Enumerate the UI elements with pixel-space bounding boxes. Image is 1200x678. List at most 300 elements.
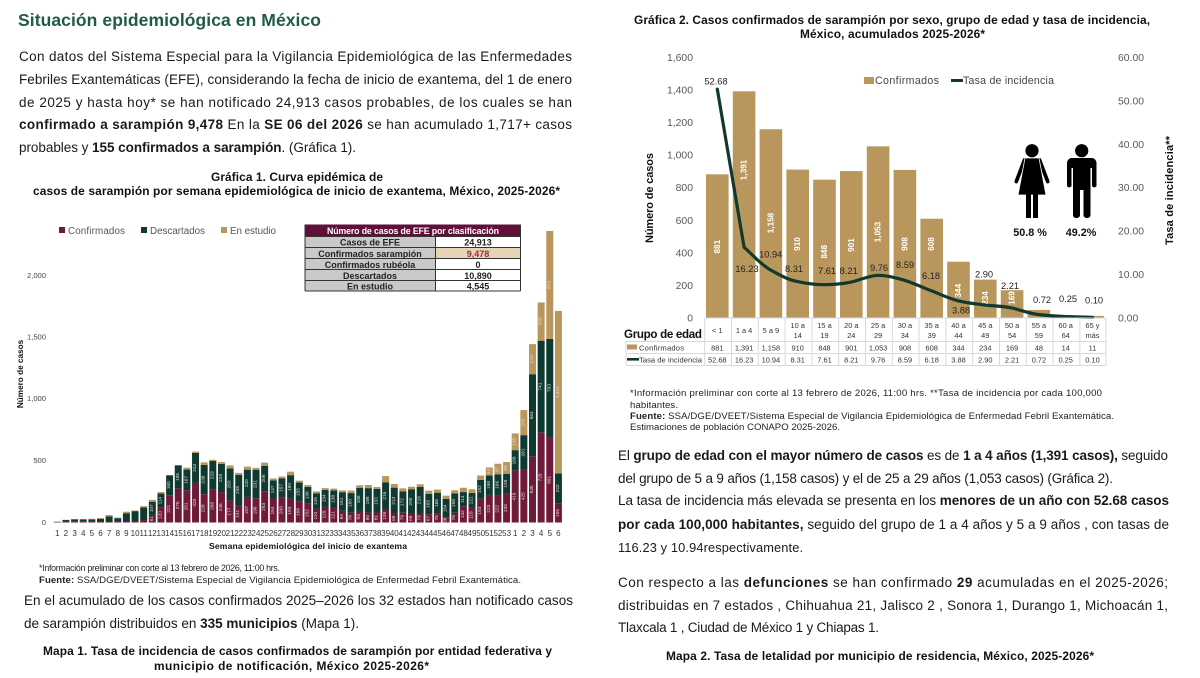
x axis week labels: Gráfica 1: 26 [269, 529, 278, 538]
x axis week labels: Gráfica 1: 51 [485, 529, 494, 538]
data labels: Gráfica 1: 198 [365, 496, 371, 504]
right axis: Gráfica 2: 20.00 [1118, 227, 1144, 238]
data labels: Gráfica 1: 216 [382, 491, 388, 500]
data labels: Gráfica 1: 76 [434, 515, 440, 520]
data labels: Gráfica 1: 79 [399, 515, 405, 520]
data table: Gráfica 2: 608 [926, 344, 938, 352]
legend: Gráfica 2: Tasa de incidencia [963, 75, 1054, 87]
legend: Gráfica 1: Descartados [150, 226, 205, 237]
footnote: Gráfica 1: *Información preliminar con corte al 13 febrero de 2026, 11:00 hrs. [39, 563, 280, 573]
data table: Gráfica 2: 2.21 [1005, 356, 1019, 364]
data table: Gráfica 2: 39 [928, 331, 936, 340]
x axis week labels: Gráfica 1: 22 [234, 529, 244, 538]
data labels: Gráfica 1: 165 [434, 499, 440, 507]
data table: Gráfica 2: 52.68 [708, 356, 727, 364]
line data labels: Gráfica 2: 0.72 [1033, 295, 1051, 305]
right axis: Gráfica 2: 10.00 [1118, 270, 1144, 281]
heading: Gráfica 1 [33, 170, 560, 198]
bar data labels: Gráfica 2: 848 [820, 244, 829, 259]
data labels: Gráfica 1: 87 [494, 466, 500, 472]
x axis week labels: Gráfica 1: 47 [450, 529, 460, 538]
data table: Gráfica 2: < 1 [712, 326, 723, 335]
table: Número de casos de EFE por clasificación: Casos de EFE [340, 238, 400, 248]
data labels: Gráfica 1: 238 [201, 475, 207, 484]
data labels: Gráfica 1: 425 [520, 492, 526, 500]
x axis week labels: Gráfica 1: 31 [312, 529, 321, 538]
data labels: Gráfica 1: 160 [348, 499, 354, 507]
data table: Gráfica 2: 50 a [1005, 321, 1020, 330]
y axis: Gráfica 1: 1,500 [27, 332, 46, 342]
line data labels: Gráfica 2: 2.21 [1001, 281, 1019, 291]
y axis: Gráfica 1 [27, 271, 46, 527]
footnote: Gráfica 2: habitantes. [630, 400, 678, 411]
data table: Gráfica 2: 0.10 [1085, 356, 1100, 364]
data labels: Gráfica 1: 691 [546, 475, 552, 484]
data table: Gráfica 2: 24 [847, 331, 855, 340]
data labels: Gráfica 1: 126 [313, 497, 319, 505]
data labels: Gráfica 1: 166 [494, 480, 500, 489]
data labels: Gráfica 1: 155 [296, 488, 302, 496]
x axis week labels: Gráfica 1: 23 [243, 529, 252, 538]
text block: intro paragraph: de 2025 y hasta hoy* se han notificado 24,913 casos probables, de los cuales se han [19, 95, 572, 110]
data labels: Gráfica 1: 243 [529, 355, 535, 363]
data table: Gráfica 2: 29 [874, 331, 882, 340]
x axis week labels: Gráfica 1: 24 [252, 529, 261, 538]
legend: Gráfica 1: Confirmados [68, 226, 125, 237]
data labels: Gráfica 1: 69 [408, 515, 414, 521]
data labels: Gráfica 1: 276 [175, 501, 181, 509]
text block: grupo de edad: del grupo de 5 a 9 años (1,158 casos) y el de 25 a 29 años (1,053 casos) (Gráfica 2). [618, 471, 1113, 486]
heading: Mapa 1: municipio de notificación, México 2025-2026* [154, 659, 429, 673]
left axis: Gráfica 2: 0 [687, 313, 693, 324]
data table: Gráfica 2: 8.31 [791, 356, 805, 364]
data table: Gráfica 2: 1,053 [869, 344, 887, 352]
data labels: Gráfica 1: 154 [443, 504, 449, 512]
table: Número de casos de EFE por clasificación: 0 [475, 260, 481, 270]
data labels: Gráfica 1: 741 [538, 382, 544, 391]
table: Número de casos de EFE por clasificación: En estudio [347, 282, 393, 292]
bar data labels: Gráfica 2: 908 [900, 237, 909, 251]
table: Número de casos de EFE por clasificación: Confirmados rubéola [325, 260, 416, 270]
data labels: Gráfica 1: 228 [201, 504, 207, 512]
data labels: Gráfica 1: 253 [261, 503, 267, 511]
data labels: Gráfica 1: 78 [451, 515, 457, 520]
data labels: Gráfica 1: 135 [512, 437, 518, 446]
heading: Mapa 1 [43, 644, 552, 673]
data labels: Gráfica 1: 203 [520, 418, 526, 427]
data labels: Gráfica 1: 194 [270, 506, 276, 515]
x axis week labels: Gráfica 1: 17 [191, 529, 200, 538]
y axis title: Gráfica 1: Número de casos [16, 339, 25, 408]
data table: Gráfica 2: 20 a [844, 321, 859, 330]
data labels: Gráfica 1: 69 [391, 515, 397, 521]
data table: Gráfica 2: 30 a [898, 321, 913, 330]
bar data labels: Gráfica 2: 1,053 [874, 221, 883, 242]
data labels: Gráfica 1: 121 [330, 511, 336, 519]
data table: Gráfica 2: 60 a [1059, 321, 1074, 330]
x axis week labels: Gráfica 1: 29 [295, 529, 304, 538]
left axis: Gráfica 2: 1,400 [667, 86, 693, 97]
data labels: Gráfica 1: 245 [235, 486, 241, 494]
data table: Gráfica 2: 169 [1006, 344, 1018, 352]
data labels: Gráfica 1: 134 [322, 494, 328, 502]
bar data labels: Gráfica 2: 344 [954, 283, 963, 298]
x axis week labels: Gráfica 1: 20 [217, 529, 226, 538]
legend: Gráfica 2 [864, 75, 1054, 87]
text block: defunciones: Con respecto a las defunciones se han confirmado 29 acumuladas en el 2025-2026; [618, 575, 1168, 590]
data labels: Gráfica 1: 213 [391, 496, 397, 505]
data labels: Gráfica 1: 200 [408, 497, 414, 506]
line data labels: Gráfica 2: 8.59 [896, 260, 914, 270]
data labels: Gráfica 1: 260 [227, 480, 233, 489]
data table: Gráfica 2 [624, 318, 1106, 366]
data labels: Gráfica 1: 246 [218, 503, 224, 511]
x axis week labels: Gráfica 1: 3 [72, 529, 77, 538]
x axis week labels: Gráfica 1: 16 [182, 529, 192, 538]
label: porcentaje hombres: 49.2% [1066, 227, 1097, 239]
left axis title: Gráfica 2: Número de casos [644, 153, 656, 243]
x axis week labels: Gráfica 1: 37 [364, 529, 373, 538]
data labels: Gráfica 1: 231 [252, 480, 258, 488]
text block: defunciones [618, 575, 1168, 635]
data table: Gráfica 2: 44 [954, 331, 963, 340]
left axis: Gráfica 2: 1,600 [667, 53, 693, 64]
data labels: Gráfica 1: 268 [209, 502, 215, 510]
table: Número de casos de EFE por clasificación: Número de casos de EFE por clasificación [327, 226, 499, 236]
text block: defunciones: Tlaxcala 1 , Ciudad de México 1 y Chiapas 1. [618, 620, 879, 635]
data labels: Gráfica 1: 168 [296, 508, 302, 516]
bar data labels: Gráfica 2: 1,158 [766, 212, 775, 233]
text block: intro paragraph: confirmado a sarampión 9,478 En la SE 06 del 2026 se han acumulado 1,717+ casos [19, 117, 572, 132]
data labels: Gráfica 1: 67 [425, 515, 431, 521]
data labels: Gráfica 1: 151 [339, 497, 345, 506]
x axis week labels: Gráfica 1: 7 [107, 529, 112, 538]
heading: Gráfica 1: Gráfica 1. Curva epidémica de [211, 170, 383, 184]
text block: intro paragraph: Con datos del Sistema Especial para la Vigilancia Epidemiológica de las Enfermedades [19, 49, 572, 64]
data labels: Gráfica 1: 172 [399, 498, 405, 506]
data table: Gráfica 2: 234 [979, 344, 991, 352]
text block: grupo de edad: por cada 100,000 habitantes, seguido del grupo de 1 a 4 años y 5 a 9 años , con tasas de [618, 517, 1169, 532]
data labels: Gráfica 1: 95 [503, 465, 509, 471]
data labels: Gráfica 1: 729 [538, 473, 544, 481]
line data labels: Gráfica 2 [704, 77, 1103, 316]
x axis week labels: Gráfica 1: 21 [226, 529, 235, 538]
data labels: Gráfica 1: 177 [227, 507, 233, 516]
line: tasa de incidencia [717, 89, 1092, 317]
data labels: Gráfica 1: 78 [348, 515, 354, 520]
data table: Gráfica 2: 848 [818, 344, 831, 352]
x axis week labels: Gráfica 1: 34 [338, 529, 347, 538]
heading: Mapa 1: Mapa 1. Tasa de incidencia de casos confirmados de sarampión por entidad federativa y [43, 644, 552, 658]
data table: Gráfica 2: 6.18 [925, 356, 939, 364]
x axis week labels: Gráfica 1: 42 [407, 529, 416, 538]
data labels: Gráfica 1: 107 [149, 504, 155, 512]
heading: Gráfica 2: México, acumulados 2025-2026* [800, 27, 985, 41]
data labels: Gráfica 1: 223 [486, 504, 492, 513]
x axis title: Gráfica 1: Semana epidemiológica del inicio de exantema [209, 541, 407, 551]
data labels: Gráfica 1: 190 [287, 483, 293, 491]
x axis week labels: Gráfica 1: 32 [321, 529, 330, 538]
x axis week labels: Gráfica 1: 19 [208, 529, 218, 538]
data table: Gráfica 2: 8.59 [898, 356, 912, 364]
x axis week labels: Gráfica 1: 45 [433, 529, 442, 538]
line data labels: Gráfica 2: 52.68 [704, 77, 728, 87]
line data labels: Gráfica 2: 0.25 [1059, 294, 1077, 304]
icon: hombre [1067, 144, 1096, 218]
data labels: Gráfica 1: 188 [356, 495, 362, 503]
data labels: Gráfica 1: 141 [235, 509, 241, 518]
line data labels: Gráfica 2: 0.10 [1085, 296, 1103, 306]
data table: Gráfica 2: 908 [899, 344, 911, 352]
icon: mujer [1016, 144, 1048, 218]
x axis week labels: Gráfica 1: 33 [329, 529, 339, 538]
x axis week labels: Gráfica 1: 13 [157, 529, 166, 538]
x axis week labels: Gráfica 1: 4 [81, 529, 86, 538]
x axis week labels: Gráfica 1: 46 [442, 529, 451, 538]
data table: Gráfica 2: 10 a [791, 321, 806, 330]
x axis week labels: Gráfica 1: 36 [355, 529, 365, 538]
x axis week labels: Gráfica 1: 6 [556, 529, 561, 538]
left axis: Gráfica 2 [667, 53, 693, 324]
data labels: Gráfica 1: 147 [270, 485, 276, 493]
line data labels: Gráfica 2: 6.18 [922, 271, 940, 281]
data labels: Gráfica 1: 1,314 [555, 386, 561, 398]
data table: Gráfica 2: 9.76 [871, 356, 885, 364]
data labels: Gráfica 1: 873 [546, 281, 552, 289]
data labels: Gráfica 1: 309 [538, 317, 544, 326]
data labels: Gráfica 1: 109 [382, 511, 388, 520]
right axis: Gráfica 2 [1118, 53, 1144, 324]
data labels: Gráfica 1: 155 [555, 509, 561, 517]
data labels: Gráfica 1: 138 [330, 495, 336, 503]
footnote: Gráfica 2 [630, 388, 1114, 433]
data table: Gráfica 2: 25 a [871, 321, 886, 330]
data table: Gráfica 2: 7.61 [817, 356, 832, 364]
data labels: Gráfica 1 [149, 281, 561, 523]
footnote: Gráfica 1: Fuente: SSA/DGE/DVEET/Sistema Especial de Vigilancia Epidemiológica de Enfermedad Febril Exantemática. [39, 575, 521, 586]
x axis week labels: Gráfica 1: 2 [64, 529, 69, 538]
x axis week labels: Gráfica 1: 53 [502, 529, 512, 538]
data table: Gráfica 2: 45 a [978, 321, 993, 330]
data labels: Gráfica 1: 228 [218, 474, 224, 482]
data table: Gráfica 2: 40 a [951, 321, 967, 330]
x axis week labels: Gráfica 1: 35 [347, 529, 356, 538]
right axis: Gráfica 2: 30.00 [1118, 183, 1144, 194]
data labels: Gráfica 1: 121 [468, 496, 474, 504]
data labels: Gráfica 1: 193 [477, 506, 483, 515]
data labels: Gráfica 1: 200 [278, 506, 284, 514]
x axis week labels: Gráfica 1: 40 [390, 529, 399, 538]
x axis week labels: Gráfica 1: 11 [140, 529, 148, 538]
x axis week labels: Gráfica 1: 48 [459, 529, 468, 538]
data table: Gráfica 2: 65 y [1086, 321, 1100, 330]
data labels: Gráfica 1: 81 [374, 515, 380, 520]
left axis: Gráfica 2: 1,200 [667, 118, 693, 129]
x axis week labels: Gráfica 1: 39 [381, 529, 391, 538]
heading: Gráfica 2: Gráfica 2. Casos confirmados de sarampión por sexo, grupo de edad y tasa de incidencia, [634, 13, 1150, 27]
data labels: Gráfica 1: 220 [244, 479, 250, 487]
data table: Gráfica 2: 901 [845, 344, 857, 352]
table: Número de casos de EFE por clasificación: 10,890 [464, 271, 492, 281]
legend: Gráfica 2: Confirmados [875, 75, 939, 87]
bar chart: confirmados por grupo de edad [706, 91, 1104, 318]
data labels: Gráfica 1: 281 [520, 448, 526, 457]
line data labels: Gráfica 2: 7.61 [818, 266, 836, 276]
data labels: Gráfica 1: 93 [356, 514, 362, 519]
data table: Gráfica 2: 14 [794, 331, 802, 340]
text block: intro paragraph: probables y 155 confirmados a sarampión. (Gráfica 1). [19, 140, 356, 155]
bar data labels: Gráfica 2 [713, 159, 1017, 305]
data labels: Gráfica 1: 159 [503, 479, 509, 488]
data table: Gráfica 2: 55 a [1032, 321, 1047, 330]
data labels: Gráfica 1: 207 [244, 505, 250, 514]
x axis week labels: Gráfica 1: 18 [200, 529, 209, 538]
left axis: Gráfica 2: 1,000 [667, 151, 693, 162]
data labels: Gráfica 1: 261 [183, 502, 189, 510]
data table: Gráfica 2: Confirmados [639, 344, 684, 352]
footnote: Gráfica 1 [39, 563, 521, 586]
table: Número de casos de EFE por clasificación: 9,478 [467, 249, 489, 259]
bar data labels: Gráfica 2: 881 [713, 239, 722, 254]
data table: Gráfica 2: 2.90 [978, 356, 992, 364]
data labels: Gráfica 1: 165 [425, 500, 431, 508]
data labels: Gráfica 1: 320 [192, 498, 198, 507]
y axis: Gráfica 1: 2,000 [27, 271, 46, 280]
x axis week labels: Gráfica 1: 44 [424, 529, 434, 538]
data table: Gráfica 2: 11 [1089, 344, 1096, 352]
legend: Gráfica 1: En estudio [230, 226, 277, 237]
table: Número de casos de EFE por clasificación: Confirmados sarampión [318, 249, 422, 259]
text block: municipios: de sarampión distribuidos en 335 municipios (Mapa 1). [24, 616, 359, 631]
data labels: Gráfica 1: 229 [209, 471, 215, 479]
legend: Gráfica 1 [59, 226, 277, 237]
line data labels: Gráfica 2: 10.94 [759, 250, 782, 260]
data labels: Gráfica 1: 114 [158, 496, 164, 504]
x axis week labels: Gráfica 1: 25 [260, 529, 270, 538]
data table: Gráfica 2: 1,391 [735, 344, 753, 352]
data labels: Gráfica 1: 118 [468, 511, 474, 519]
y axis: Gráfica 1: 500 [33, 456, 46, 465]
data table: Gráfica 2: 64 [1062, 331, 1070, 340]
text block: intro paragraph [19, 49, 572, 155]
title: Situación epidemiológica en México [18, 10, 321, 30]
x axis week labels: Gráfica 1: 43 [416, 529, 425, 538]
x axis week labels: Gráfica 1: 15 [174, 529, 183, 538]
heading: Gráfica 1: casos de sarampión por semana epidemiológica de inicio de exantema, México, 2025-2026* [33, 184, 560, 198]
data labels: Gráfica 1: 160 [166, 481, 172, 489]
x axis week labels: Gráfica 1: 41 [398, 529, 408, 538]
bar data labels: Gráfica 2: 234 [981, 291, 990, 305]
data table: Gráfica 2: 49 [981, 331, 989, 340]
x axis week labels: Gráfica 1: 38 [373, 529, 382, 538]
x axis week labels: Gráfica 1: 52 [493, 529, 503, 538]
data table: Gráfica 2: 344 [952, 344, 965, 352]
data labels: Gráfica 1: 73 [417, 515, 423, 521]
x axis week labels: Gráfica 1: 1 [513, 529, 518, 538]
data table: Gráfica 2: 3.88 [951, 356, 966, 364]
text block: grupo de edad [618, 448, 1169, 555]
line data labels: Gráfica 2: 2.90 [975, 270, 993, 280]
bar data labels: Gráfica 2: 901 [847, 238, 856, 252]
stacked bar chart: Gráfica 1 [54, 231, 562, 523]
data labels: Gráfica 1: 221 [166, 504, 172, 513]
x axis week labels: Gráfica 1: 2 [522, 529, 527, 538]
data table: Gráfica 2: 10.94 [762, 356, 780, 364]
heading: Gráfica 2 [634, 13, 1150, 41]
y axis: Gráfica 1: 0 [42, 518, 46, 527]
bar data labels: Gráfica 2: 169 [1008, 291, 1017, 305]
text block: municipios [24, 593, 573, 631]
data labels: Gráfica 1: 222 [494, 504, 500, 513]
text block: grupo de edad: 116.23 y 10.94respectivamente. [618, 540, 803, 555]
data labels: Gráfica 1: 132 [460, 510, 466, 518]
data labels: Gráfica 1: 64 [486, 468, 492, 474]
data labels: Gráfica 1: 80 [365, 515, 371, 520]
x axis week labels: Gráfica 1: 6 [98, 529, 103, 538]
data labels: Gráfica 1: 110 [313, 512, 319, 520]
left axis: Gráfica 2: 400 [676, 248, 693, 259]
left axis: Gráfica 2: 800 [676, 183, 693, 194]
x axis week labels: Gráfica 1: 8 [116, 529, 121, 538]
x axis week labels: Gráfica 1: 10 [131, 529, 140, 538]
line data labels: Gráfica 2: 16.23 [735, 264, 759, 274]
data table: Gráfica 2: 15 a [817, 321, 833, 330]
right axis: Gráfica 2: 60.00 [1118, 53, 1144, 64]
data labels: Gráfica 1: 120 [158, 511, 164, 519]
right axis: Gráfica 2: 50.00 [1118, 96, 1144, 107]
line data labels: Gráfica 2: 8.31 [785, 264, 803, 274]
x axis week labels: Gráfica 1: 9 [124, 529, 129, 538]
right axis: Gráfica 2: 40.00 [1118, 140, 1144, 151]
x axis week labels: Gráfica 1: 4 [539, 529, 544, 538]
data labels: Gráfica 1: 114 [460, 495, 466, 503]
line data labels: Gráfica 2: 9.76 [870, 263, 888, 273]
text block: municipios: En el acumulado de los casos confirmados 2025–2026 los 32 estados han notificado casos [24, 593, 573, 608]
data table: Gráfica 2: 1 a 4 [736, 326, 752, 335]
data labels: Gráfica 1: 166 [512, 456, 518, 464]
x axis week labels: Gráfica 1: 28 [286, 529, 296, 538]
text block: grupo de edad: La tasa de incidencia más elevada se presenta en los menores de un año con 52.68 casos [618, 493, 1169, 508]
data table: Gráfica 2: 16.23 [735, 356, 753, 364]
data labels: Gráfica 1: 136 [304, 491, 310, 499]
data labels: Gráfica 1: 193 [287, 506, 293, 515]
data labels: Gráfica 1: 157 [278, 484, 284, 492]
data labels: Gráfica 1: 158 [486, 481, 492, 489]
data labels: Gráfica 1: 243 [192, 464, 198, 472]
data table: Gráfica 2: 0.72 [1032, 356, 1046, 364]
data labels: Gráfica 1: 216 [417, 496, 423, 504]
data labels: Gráfica 1: 94 [339, 514, 345, 519]
data table: Gráfica 2: 54 [1008, 331, 1016, 340]
table: Número de casos de EFE por clasificación: Descartados [343, 271, 397, 281]
data table: Gráfica 2: 5 a 9 [763, 326, 779, 335]
data table: Gráfica 2: 48 [1035, 344, 1043, 352]
x axis week labels: Gráfica 1: 5 [548, 529, 553, 538]
y axis: Gráfica 1: 1,000 [27, 394, 46, 403]
text block: grupo de edad: El grupo de edad con el mayor número de casos es de 1 a 4 años (1,391 casos), seguido [618, 448, 1168, 463]
data table: Gráfica 2: 881 [711, 344, 723, 352]
table: Número de casos de EFE por clasificación [305, 224, 520, 292]
data table: Gráfica 2: 14 [1062, 344, 1070, 352]
data table: Gráfica 2: más [1086, 331, 1100, 340]
data labels: Gráfica 1: 206 [261, 474, 267, 483]
data table: Gráfica 2: Tasa de incidencia [639, 356, 703, 364]
data labels: Gráfica 1: 196 [252, 506, 258, 514]
bar data labels: Gráfica 2: 910 [793, 237, 802, 251]
footnote: Gráfica 2: Fuente: SSA/DGE/DVEET/Sistema Especial de Vigilancia Epidemiológica de Enfermedad Febril Exantemática. [630, 411, 1114, 422]
text block: intro paragraph: Febriles Exantemáticas (EFE), considerando la fecha de inicio de exantema, del 1 de enero [19, 72, 572, 87]
data labels: Gráfica 1: 535 [529, 485, 535, 493]
